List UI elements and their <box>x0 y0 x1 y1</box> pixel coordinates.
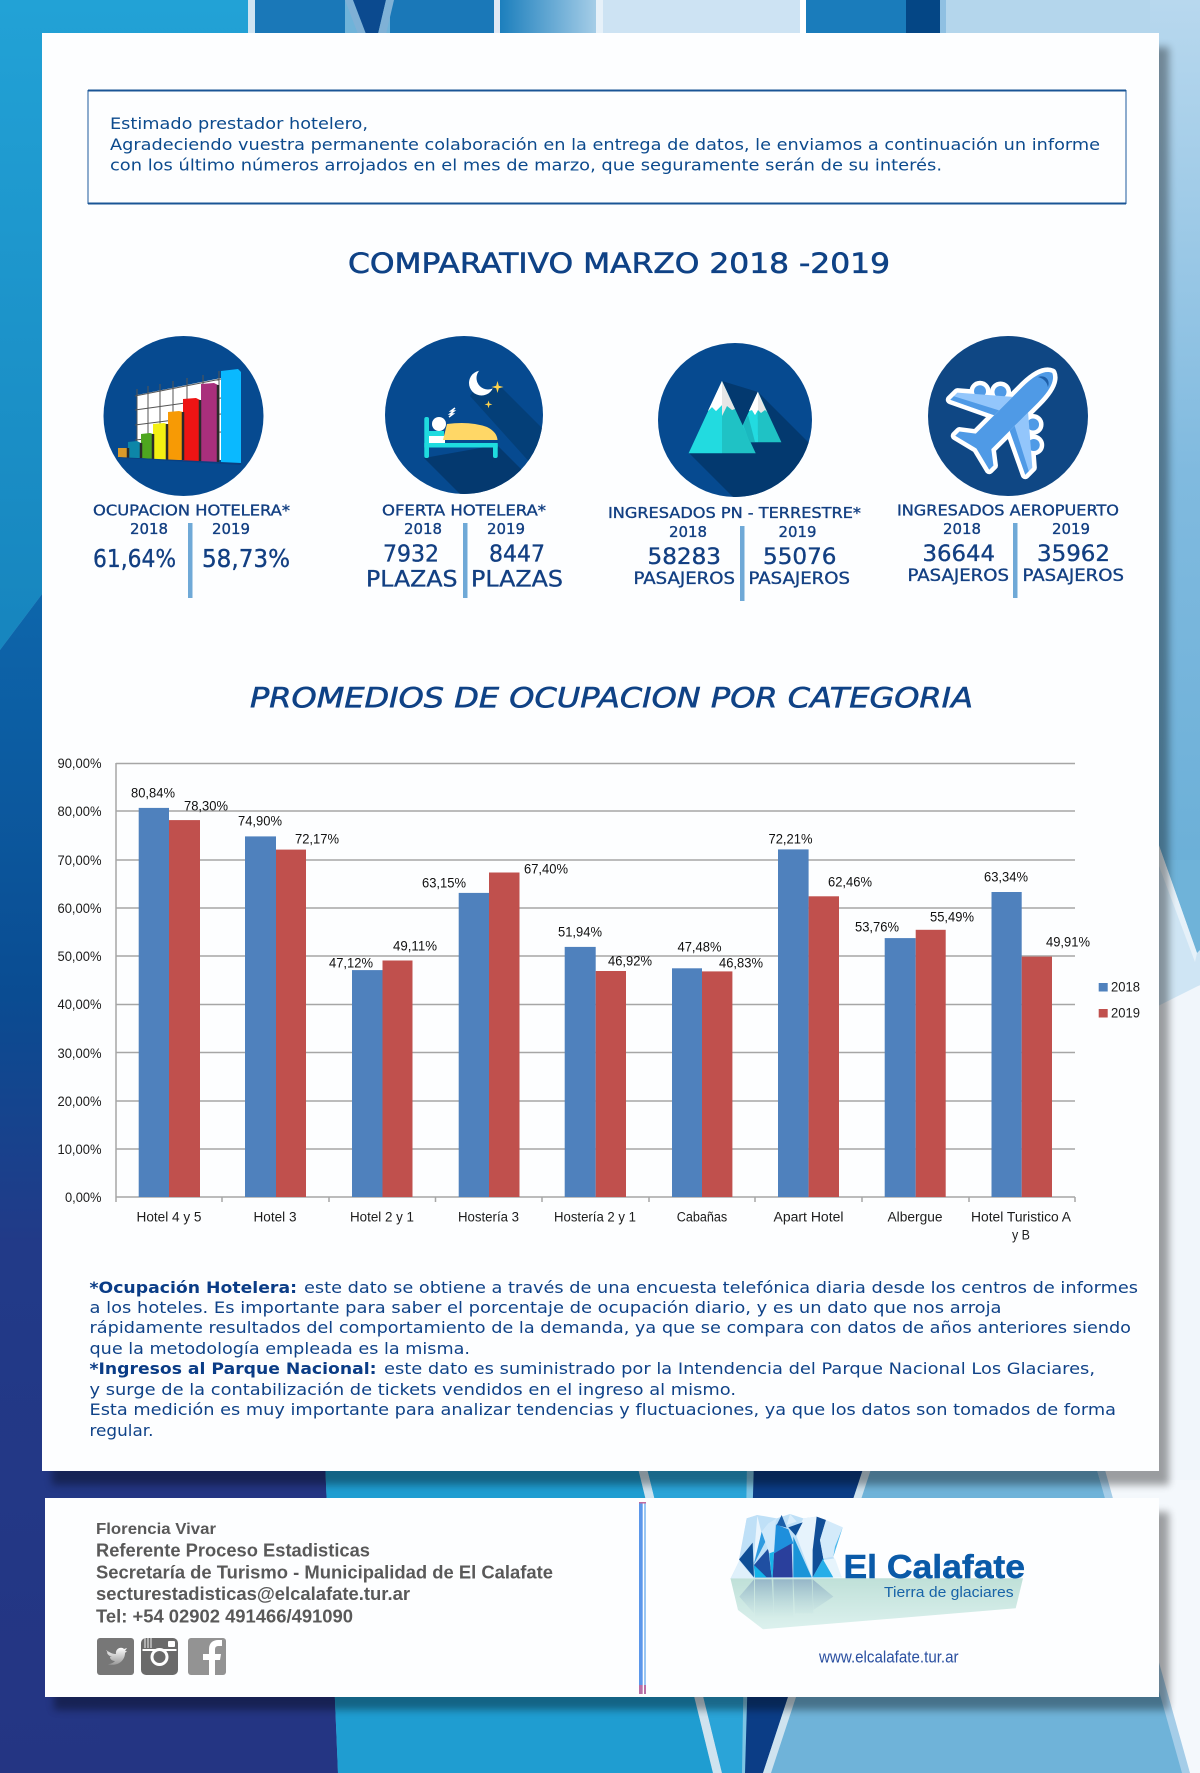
y axis labels: 40,00% <box>58 997 102 1012</box>
text block: footnotes: Esta medición es muy importante para analizar tendencias y fluctuaciones, ya que los datos son tomados de forma <box>90 1400 1116 1419</box>
category labels: Albergue <box>888 1210 942 1224</box>
text block: footnotes: este dato es suministrado por la Intendencia del Parque Nacional Los Glaciares, <box>384 1359 1095 1378</box>
year 2019: 2019 <box>487 520 525 538</box>
y axis labels: 30,00% <box>58 1046 102 1061</box>
divider <box>740 526 744 601</box>
heading: comparativo: COMPARATIVO MARZO 2018 -2019 <box>348 246 890 280</box>
logo iceberg <box>731 1514 843 1618</box>
unit 2019: PASAJEROS <box>748 569 850 589</box>
unit 2019: PLAZAS <box>471 568 563 592</box>
category labels: Hostería 2 y 1 <box>554 1210 636 1224</box>
icon: facebook <box>188 1638 226 1675</box>
icon: airplane <box>928 335 1090 496</box>
stat block: ingresados PN terrestre <box>608 343 862 601</box>
intro message box: Estimado prestador hotelero, <box>110 114 368 133</box>
data labels: 47,48% <box>678 940 722 954</box>
divider <box>188 523 192 598</box>
contact details: Tel: +54 02902 491466/491090 <box>96 1606 353 1626</box>
data labels: 46,92% <box>608 954 652 968</box>
legend: 2018 <box>1111 980 1140 994</box>
y axis labels: 70,00% <box>58 853 102 868</box>
panel: main report <box>42 33 1159 1471</box>
value 2018: 7932 <box>383 542 439 568</box>
label: INGRESADOS AEROPUERTO <box>897 502 1119 520</box>
unit 2019: PASAJEROS <box>1022 566 1124 586</box>
value 2019: 35962 <box>1037 542 1110 567</box>
divider <box>463 523 468 598</box>
heading: promedios: PROMEDIOS DE OCUPACION POR CATEGORIA <box>250 681 973 714</box>
unit 2018: PASAJEROS <box>634 569 735 589</box>
value 2019: 58,73% <box>202 544 290 573</box>
data labels: 63,34% <box>984 870 1028 884</box>
icon: instagram <box>141 1638 178 1675</box>
intro message box <box>88 90 1126 204</box>
divider <box>1013 523 1018 598</box>
y axis labels: 80,00% <box>58 804 102 819</box>
value 2018: 58283 <box>648 545 721 570</box>
data labels: 49,91% <box>1046 934 1090 950</box>
icon: bar chart <box>104 336 264 496</box>
value 2018: 61,64% <box>93 544 176 573</box>
bars 2019 <box>169 820 1052 1197</box>
y axis labels: 60,00% <box>58 901 102 916</box>
data labels: 74,90% <box>238 814 282 828</box>
text block: footnotes: regular. <box>90 1421 154 1440</box>
category labels: y B <box>1012 1228 1030 1242</box>
data labels: 46,83% <box>719 956 763 970</box>
year 2019: 2019 <box>778 523 816 541</box>
value 2019: 55076 <box>763 545 836 570</box>
text block: footnotes: *Ingresos al Parque Nacional: <box>90 1359 376 1378</box>
label: INGRESADOS PN - TERRESTRE* <box>608 504 862 522</box>
icon: bed at night <box>385 336 543 494</box>
data labels: 51,94% <box>558 924 602 940</box>
year 2019: 2019 <box>212 520 250 538</box>
contact details: Florencia Vivar <box>96 1521 216 1538</box>
panel: contact footer <box>45 1498 1159 1697</box>
logo name: El Calafate <box>844 1548 1025 1585</box>
intro message box: con los último números arrojados en el mes de marzo, que seguramente serán de su interés. <box>110 156 942 174</box>
legend <box>1099 980 1140 1020</box>
data labels: 63,15% <box>422 876 466 890</box>
contact details: Secretaría de Turismo - Municipalidad de El Calafate <box>96 1562 553 1582</box>
value 2019: 8447 <box>489 542 545 568</box>
data labels: 80,84% <box>131 786 175 800</box>
category labels: Hotel 2 y 1 <box>350 1210 414 1224</box>
category labels <box>136 1210 1071 1242</box>
data labels: 78,30% <box>184 798 228 814</box>
stat block: oferta hotelera <box>368 336 562 598</box>
stat block: ingresados aeropuerto <box>897 335 1124 598</box>
y axis labels: 0,00% <box>65 1190 102 1205</box>
data labels: 55,49% <box>930 910 974 924</box>
data labels: 62,46% <box>828 874 872 890</box>
year 2018: 2018 <box>404 520 442 538</box>
bars 2018 <box>139 808 1022 1197</box>
contact details: secturestadisticas@elcalafate.tur.ar <box>96 1584 410 1604</box>
logo tagline: Tierra de glaciares <box>884 1584 1014 1601</box>
category labels: Cabañas <box>677 1210 727 1224</box>
bar chart: ocupacion por categoria <box>58 756 1140 1242</box>
contact details: Referente Proceso Estadisticas <box>96 1540 370 1560</box>
website: www.elcalafate.tur.ar <box>818 1648 959 1666</box>
unit 2018: PASAJEROS <box>908 566 1009 586</box>
icon: twitter <box>97 1638 134 1675</box>
category labels: Hotel Turistico A <box>971 1210 1071 1224</box>
text block: footnotes: *Ocupación Hotelera: <box>90 1278 297 1297</box>
contact details <box>96 1521 553 1626</box>
data labels: 49,11% <box>393 938 437 954</box>
data labels <box>131 786 1090 970</box>
year 2018: 2018 <box>669 523 707 541</box>
category labels: Apart Hotel <box>774 1210 844 1224</box>
stat block: ocupacion hotelera <box>93 336 291 598</box>
y axis labels: 50,00% <box>58 949 102 964</box>
y axis labels: 20,00% <box>58 1094 102 1109</box>
text block: footnotes: a los hoteles. Es importante para saber el porcentaje de ocupación diario, y es un dato que nos arroja <box>90 1298 1001 1317</box>
vertical divider <box>639 1502 646 1694</box>
data labels: 72,21% <box>768 832 812 846</box>
year 2019: 2019 <box>1052 520 1090 538</box>
label: OCUPACION HOTELERA* <box>93 502 291 520</box>
intro message box: Agradeciendo vuestra permanente colaboración en la entrega de datos, le enviamos a continuación un informe <box>110 135 1100 154</box>
text block: footnotes: rápidamente resultados del comportamiento de la demanda, ya que se compara con datos de años anteriores siendo <box>90 1318 1131 1337</box>
data labels: 47,12% <box>329 956 373 970</box>
text block: footnotes <box>90 1278 1138 1440</box>
category labels: Hotel 3 <box>254 1210 296 1224</box>
data labels: 72,17% <box>295 832 339 846</box>
year 2018: 2018 <box>130 520 168 538</box>
data labels: 53,76% <box>855 920 899 934</box>
text block: footnotes: que la metodología empleada es la misma. <box>90 1339 470 1358</box>
icon: mountains <box>658 343 812 497</box>
category labels: Hotel 4 y 5 <box>136 1210 202 1224</box>
logo ice band <box>730 1578 1023 1629</box>
y axis labels: 90,00% <box>58 756 102 771</box>
y axis labels <box>58 756 102 1205</box>
logo: El Calafate <box>730 1514 1025 1629</box>
legend: 2019 <box>1111 1006 1140 1020</box>
category labels: Hostería 3 <box>458 1210 519 1224</box>
value 2018: 36644 <box>922 542 995 567</box>
y axis labels: 10,00% <box>58 1142 102 1157</box>
unit 2018: PLAZAS <box>366 568 458 592</box>
data labels: 67,40% <box>524 862 568 876</box>
text block: footnotes: y surge de la contabilización de tickets vendidos en el ingreso al mismo. <box>90 1380 736 1399</box>
label: OFERTA HOTELERA* <box>382 502 547 520</box>
year 2018: 2018 <box>943 520 981 538</box>
text block: footnotes: este dato se obtiene a través de una encuesta telefónica diaria desde los centros de informes <box>304 1278 1138 1297</box>
